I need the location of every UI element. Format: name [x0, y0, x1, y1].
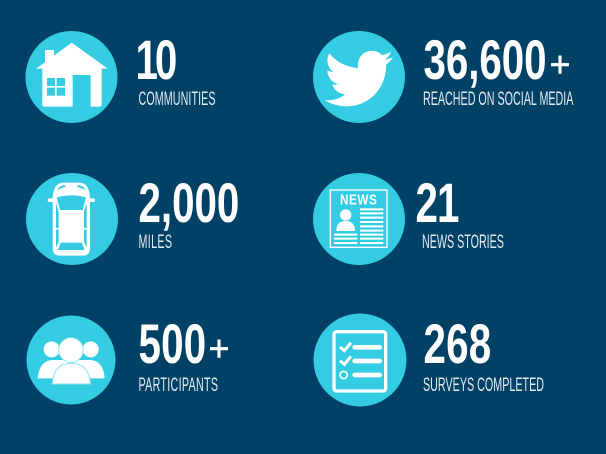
icon: newspaper: [313, 173, 405, 265]
icon: newspaper: NEWS: [340, 191, 377, 208]
number: 10: 10: [136, 30, 177, 92]
label: communities: COMMUNITIES: [138, 89, 216, 110]
stat: news stories: [313, 173, 504, 265]
label: surveys completed: SURVEYS COMPLETED: [423, 375, 544, 396]
number: 268: 268: [424, 314, 491, 376]
label: reached on social media: REACHED ON SOCIAL MEDIA: [423, 89, 574, 110]
number: 36,600+: 36,600: [424, 30, 547, 92]
icon: house: [26, 31, 118, 123]
number: 2,000: 2,000: [138, 173, 239, 235]
stat: communities: [26, 30, 216, 123]
number: 500+: +: [208, 328, 230, 368]
stat: surveys completed: [314, 314, 544, 406]
stat: social media: [313, 30, 574, 123]
stat: participants: [26, 314, 230, 404]
icon: car: [26, 173, 118, 265]
number: 21: 21: [416, 173, 459, 235]
label: participants: PARTICIPANTS: [138, 375, 218, 396]
icon: checklist: [314, 314, 406, 406]
label: news stories: NEWS STORIES: [422, 232, 504, 253]
number: 36,600+: +: [550, 44, 571, 84]
icon: twitter bird: [313, 31, 405, 123]
icon: people: [26, 316, 116, 404]
label: miles: MILES: [138, 232, 172, 253]
stat: miles: [26, 173, 239, 265]
number: 500+: 500: [138, 314, 206, 376]
